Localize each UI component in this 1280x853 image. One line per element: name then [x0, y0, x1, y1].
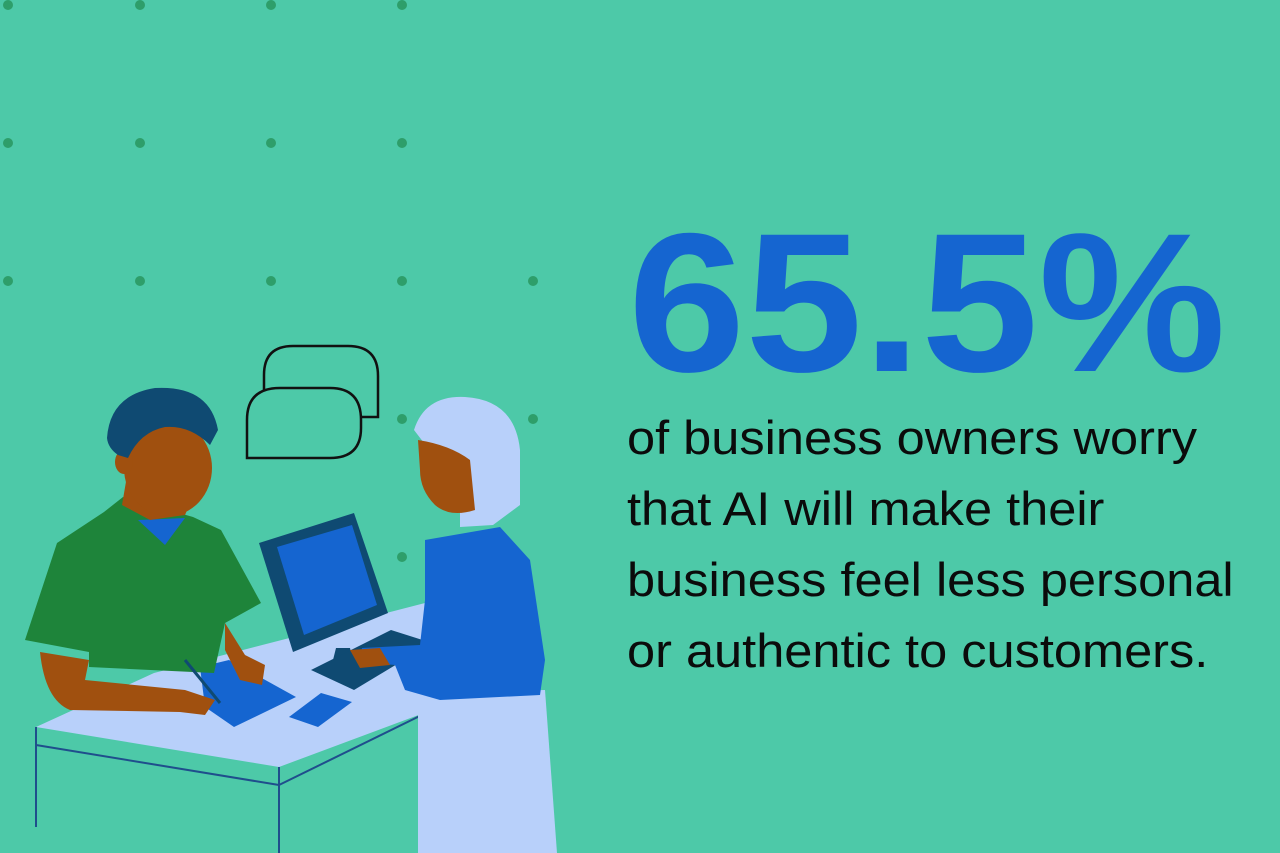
monitor: [259, 513, 432, 690]
description text: of business owners worry: [627, 411, 1197, 464]
description text: or authentic to customers.: [627, 624, 1208, 677]
desk: [36, 603, 432, 853]
description text: that AI will make their: [627, 482, 1104, 535]
paper and card: [200, 660, 352, 727]
dot grid: [3, 0, 538, 562]
description text: business feel less personal: [627, 553, 1234, 606]
icon: speech bubbles: [247, 346, 378, 458]
description text: [627, 411, 1234, 677]
big statistic: 65.5%: [628, 192, 1226, 413]
woman: [350, 397, 557, 853]
man: [25, 388, 265, 715]
